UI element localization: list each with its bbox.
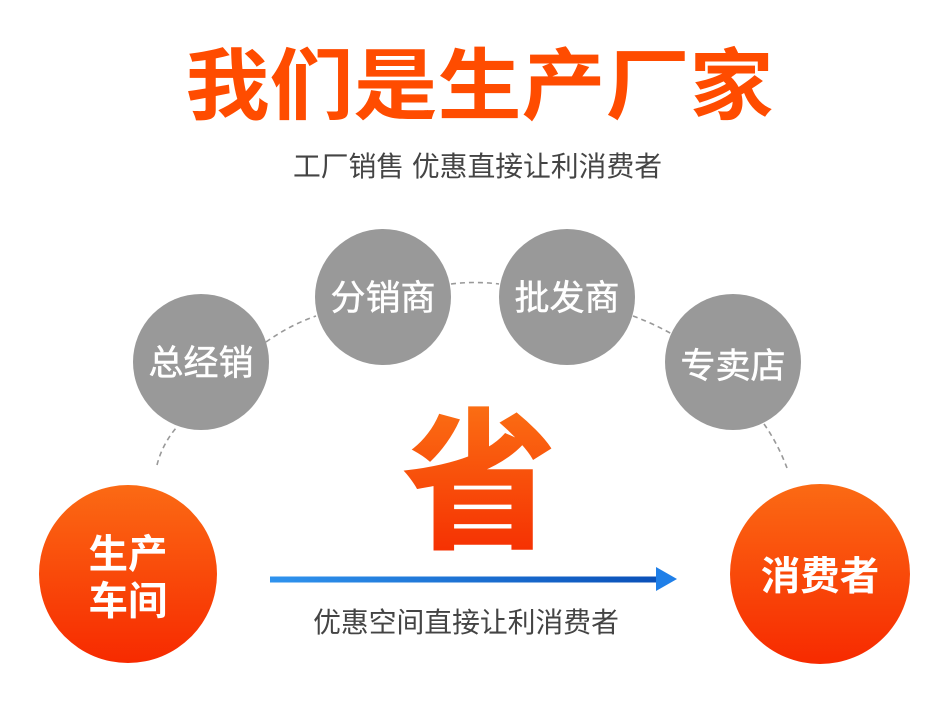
circle: 生产车间 — [39, 485, 217, 663]
node: 批发商 — [499, 229, 635, 365]
dashed connecting arc — [157, 282, 787, 468]
node: 分销商: 分销商 — [330, 279, 436, 318]
node: 总经销 — [133, 294, 269, 430]
circle: 消费者: 消费者 — [761, 555, 879, 599]
node: 总经销: 总经销 — [148, 344, 254, 383]
circle: 消费者 — [730, 484, 910, 664]
node: 专卖店 — [665, 294, 801, 430]
arrow — [270, 567, 677, 591]
node: 专卖店: 专卖店 — [680, 347, 786, 386]
title: 我们是生产厂家 — [186, 44, 773, 130]
big character: 省: 省 — [404, 400, 555, 568]
circle: 生产车间: 车间 — [88, 580, 168, 624]
subtitle: 工厂销售 优惠直接让利消费者 — [293, 151, 662, 182]
arrow caption: 优惠空间直接让利消费者 — [313, 607, 619, 638]
node: 批发商: 批发商 — [514, 279, 620, 318]
node: 分销商 — [315, 229, 451, 365]
circle: 生产车间: 生产 — [88, 533, 168, 577]
